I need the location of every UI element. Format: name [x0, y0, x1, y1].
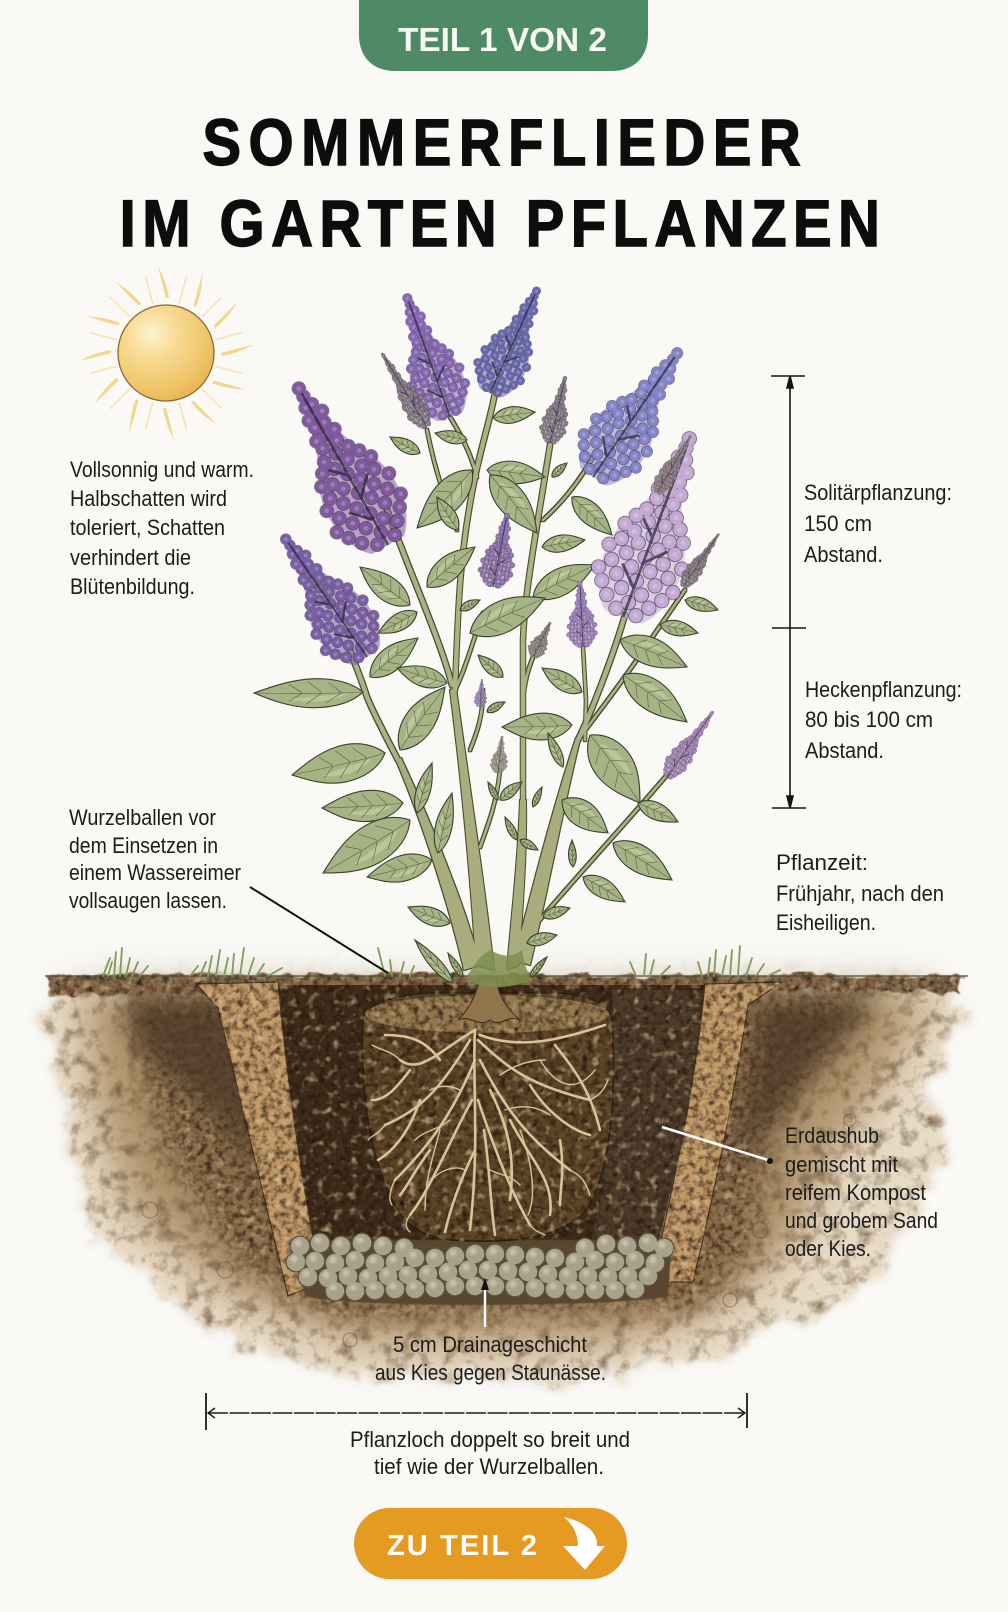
title: IM GARTEN PFLANZEN	[120, 188, 880, 261]
soil pebbles	[142, 1021, 856, 1347]
plant: butterfly bush	[254, 280, 727, 987]
text: sunlight: Vollsonnig und warm.	[70, 457, 254, 482]
right hole wall	[652, 982, 782, 1282]
text: hole size: tief wie der Wurzelballen.	[374, 1454, 604, 1479]
text: solitary spacing: 150 cm	[804, 511, 872, 536]
arrow: soak root ball leader	[250, 887, 388, 973]
text: planting time: Frühjahr, nach den	[776, 881, 944, 906]
text: sunlight: toleriert, Schatten	[70, 515, 225, 540]
text: soak root ball: Wurzelballen vor	[69, 805, 216, 830]
root crown	[458, 978, 520, 1023]
icon: curved arrow	[563, 1517, 605, 1570]
text: soak root ball: vollsaugen lassen.	[69, 888, 227, 913]
grass tufts	[103, 946, 780, 976]
arrow: soil mix leader	[662, 1127, 773, 1164]
text: hole size	[350, 1427, 630, 1479]
inner soil tone	[130, 995, 870, 1315]
text: soil mix	[785, 1123, 938, 1261]
text: soak root ball	[69, 805, 241, 913]
part badge	[359, 0, 648, 71]
soil cross-section	[45, 946, 968, 1376]
next part button: ZU TEIL 2	[387, 1530, 537, 1562]
leaves	[254, 404, 720, 987]
text: soil mix: reifem Kompost	[785, 1180, 926, 1205]
text: planting time: Eisheiligen.	[776, 910, 876, 935]
arrow: drainage leader	[481, 1278, 489, 1327]
base tuft	[466, 950, 534, 987]
text: hedge spacing	[805, 677, 962, 763]
dark soil beside right wall	[735, 1000, 880, 1170]
text: hole size: Pflanzloch doppelt so breit und	[350, 1427, 630, 1452]
topsoil band	[48, 973, 965, 996]
text: planting time	[776, 850, 944, 935]
text: solitary spacing: Solitärpflanzung:	[804, 480, 952, 505]
outer soil wash	[48, 985, 962, 1376]
text: drainage: 5 cm Drainageschicht	[393, 1332, 587, 1357]
ground line	[45, 975, 968, 977]
text: sunlight	[70, 457, 254, 599]
text: sunlight: Blütenbildung.	[70, 574, 195, 599]
hole width dimension arrow	[206, 1393, 747, 1430]
title	[120, 107, 880, 261]
drainage gravel	[292, 1240, 672, 1305]
text: soil mix: gemischt mit	[785, 1152, 898, 1177]
text: solitary spacing	[804, 480, 952, 567]
flower panicles	[260, 280, 727, 783]
icon: sun	[79, 266, 253, 440]
title: SOMMERFLIEDER	[202, 107, 801, 180]
middle soil tone	[80, 990, 935, 1345]
text: sunlight: Halbschatten wird	[70, 486, 227, 511]
root ball	[362, 978, 613, 1241]
text: soak root ball: einem Wassereimer	[69, 860, 241, 885]
text: hedge spacing: Abstand.	[805, 738, 884, 763]
text: sunlight: verhindert die	[70, 545, 191, 570]
text: hedge spacing: 80 bis 100 cm	[805, 707, 933, 732]
text: drainage: aus Kies gegen Staunässe.	[375, 1360, 606, 1385]
spacing dimension arrow	[771, 376, 806, 808]
text: drainage	[375, 1332, 606, 1385]
dark soil beside left wall	[120, 1000, 270, 1180]
text: soil mix: oder Kies.	[785, 1236, 871, 1261]
planting hole fill	[273, 985, 705, 1256]
next part button	[354, 1508, 627, 1579]
part badge: TEIL 1 VON 2	[398, 21, 607, 58]
text: solitary spacing: Abstand.	[804, 542, 883, 567]
text: planting time: Pflanzeit:	[776, 850, 868, 875]
lighter fill soil at right of hole	[590, 990, 702, 1248]
text: soak root ball: dem Einsetzen in	[69, 833, 218, 858]
stems	[350, 393, 685, 970]
text: soil mix: und grobem Sand	[785, 1208, 938, 1233]
text: soil mix: Erdaushub	[785, 1123, 879, 1148]
roots	[368, 1025, 608, 1235]
text: hedge spacing: Heckenpflanzung:	[805, 677, 962, 702]
left hole wall	[196, 982, 322, 1296]
